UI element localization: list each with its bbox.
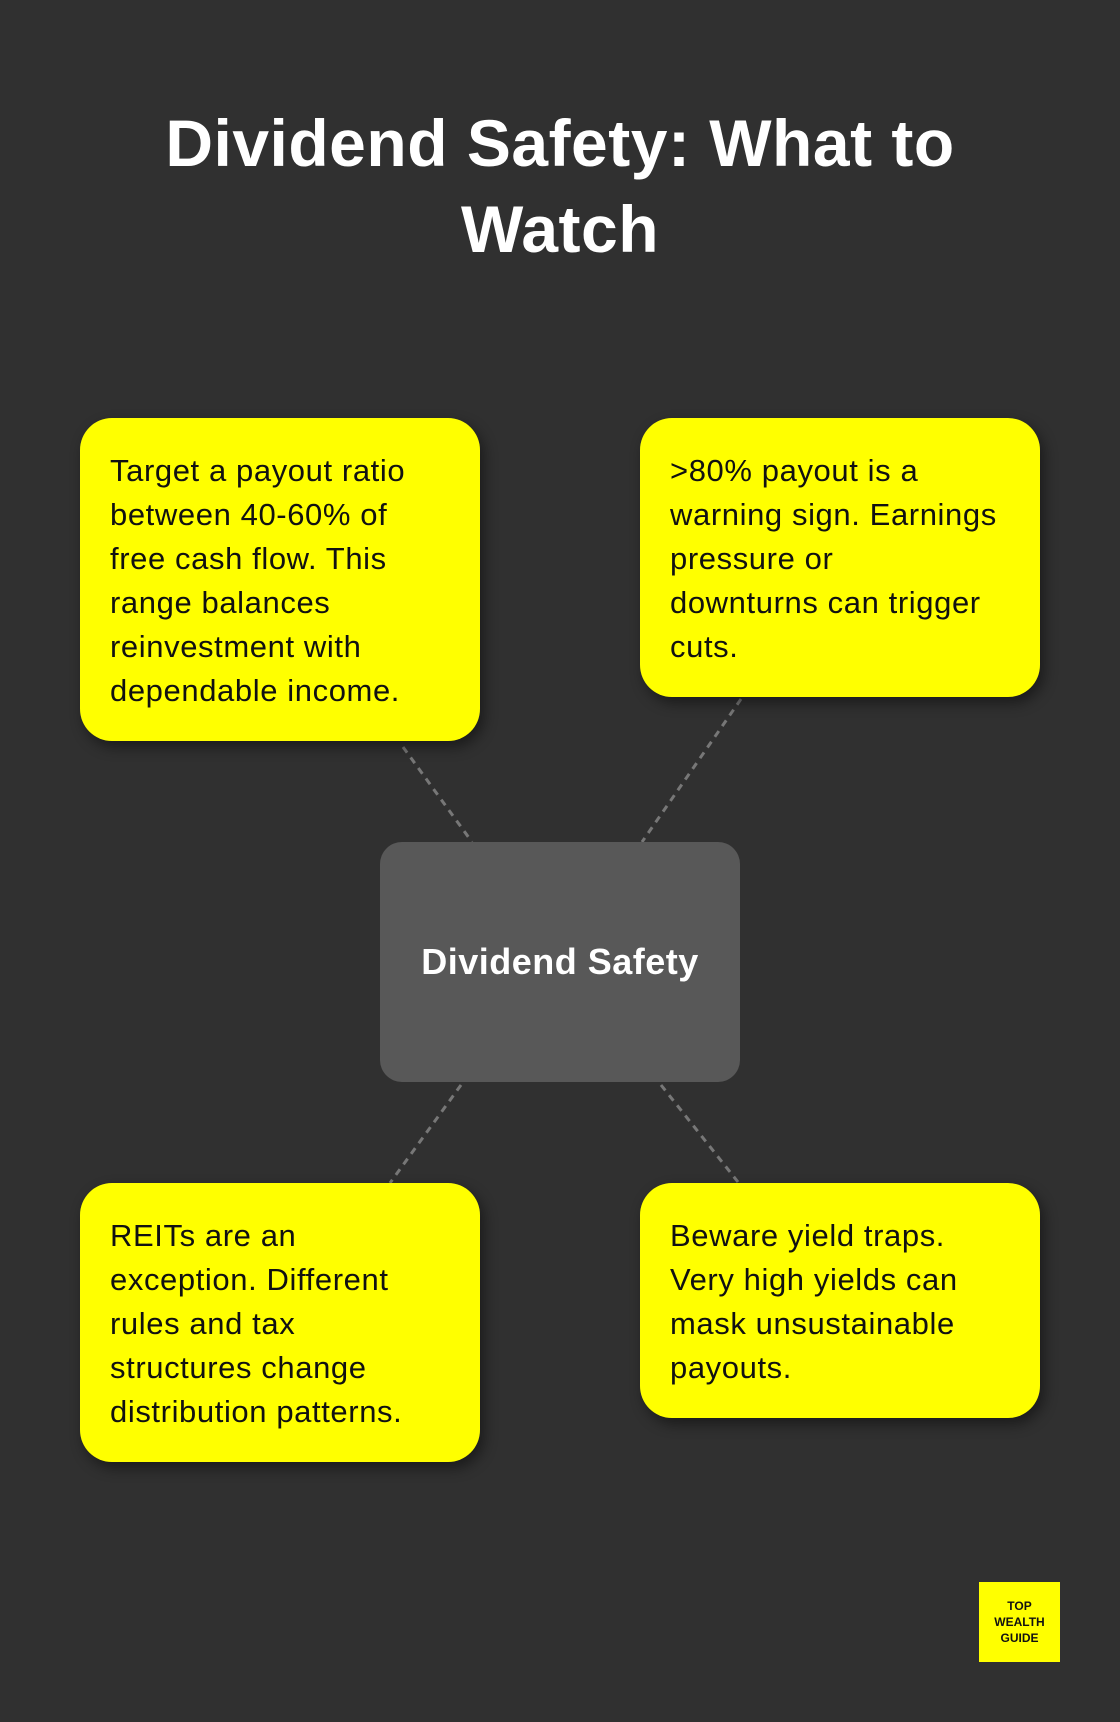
card: payout ratio target: free cash flow. This	[110, 541, 387, 576]
card: REITs: structures change	[110, 1350, 367, 1385]
center node	[380, 842, 740, 1082]
logo: TOP	[1007, 1599, 1032, 1613]
card: payout ratio target: dependable income.	[110, 673, 400, 708]
title: Dividend Safety: What to	[165, 106, 955, 180]
card: warning sign: downturns can trigger	[670, 585, 981, 620]
card: warning sign: cuts.	[670, 629, 738, 664]
card: REITs: exception. Different	[110, 1262, 389, 1297]
title: Watch	[461, 192, 659, 266]
card: yield traps: mask unsustainable	[670, 1306, 955, 1341]
card: yield traps: Beware yield traps.	[670, 1218, 945, 1253]
card: REITs: distribution patterns.	[110, 1394, 402, 1429]
card: yield traps: Very high yields can	[670, 1262, 958, 1297]
center node: Dividend Safety	[421, 941, 699, 982]
card: warning sign: >80% payout is a	[670, 453, 918, 488]
card: payout ratio target: Target a payout ratio	[110, 453, 405, 488]
title	[165, 106, 955, 266]
card: REITs: rules and tax	[110, 1306, 295, 1341]
card: REITs	[80, 1183, 480, 1462]
logo	[979, 1582, 1060, 1662]
card: yield traps	[640, 1183, 1040, 1418]
logo: WEALTH	[994, 1615, 1045, 1629]
logo: GUIDE	[1000, 1631, 1038, 1645]
card: yield traps: payouts.	[670, 1350, 792, 1385]
card: payout ratio target	[80, 418, 480, 741]
card: warning sign: warning sign. Earnings	[670, 497, 997, 532]
card: payout ratio target: between 40-60% of	[110, 497, 387, 532]
card: payout ratio target: reinvestment with	[110, 629, 361, 664]
card: payout ratio target: range balances	[110, 585, 330, 620]
card: warning sign: pressure or	[670, 541, 833, 576]
card: REITs: REITs are an	[110, 1218, 296, 1253]
card: warning sign	[640, 418, 1040, 697]
